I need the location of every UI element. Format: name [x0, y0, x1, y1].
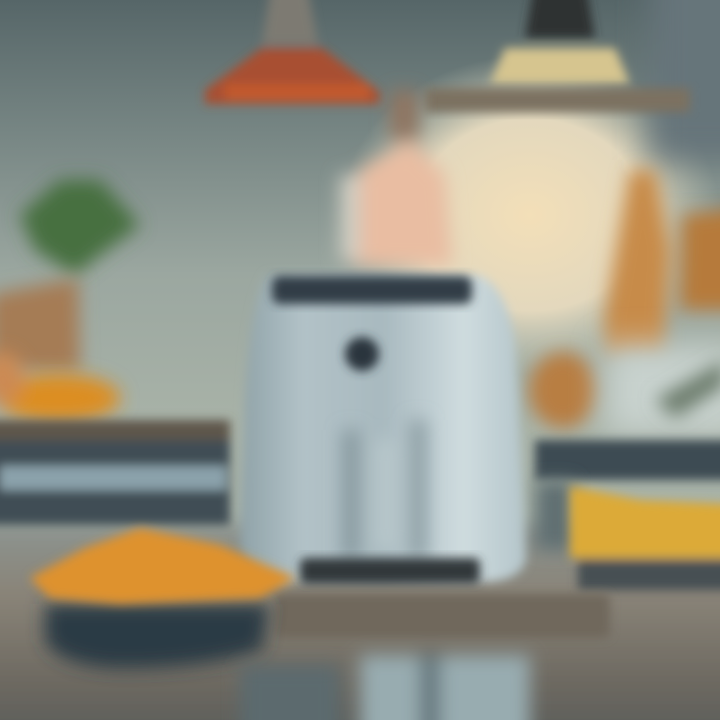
lower counter surface — [0, 525, 720, 720]
orange fries — [30, 528, 296, 604]
bowl of oranges in foreground — [30, 528, 296, 668]
counter reflection — [240, 655, 530, 720]
fryer top panel — [272, 276, 472, 304]
fryer dial button — [345, 337, 379, 371]
peach steam column — [340, 90, 452, 265]
oranges on left counter — [0, 352, 120, 422]
fryer vertical handle streaks — [343, 420, 426, 560]
white items on right — [605, 345, 720, 435]
fryer body — [240, 275, 526, 582]
orange bottle and wooden items on the right — [604, 170, 720, 356]
fryer base — [300, 558, 480, 584]
potted plant — [0, 180, 140, 370]
air fryer — [240, 275, 526, 584]
wooden cutting board — [275, 594, 610, 638]
yellow food bowl on right — [570, 486, 720, 590]
right lower cabinet — [535, 480, 575, 550]
dark bowl — [45, 604, 270, 668]
round orange fruit — [529, 352, 597, 428]
right dark counter band — [535, 440, 720, 480]
left counter and drawers — [0, 420, 230, 525]
wooden shelf — [425, 88, 690, 112]
cream pendant lamp — [490, 0, 630, 84]
green leaf on right — [655, 360, 720, 418]
red pendant lamp — [205, 0, 380, 104]
